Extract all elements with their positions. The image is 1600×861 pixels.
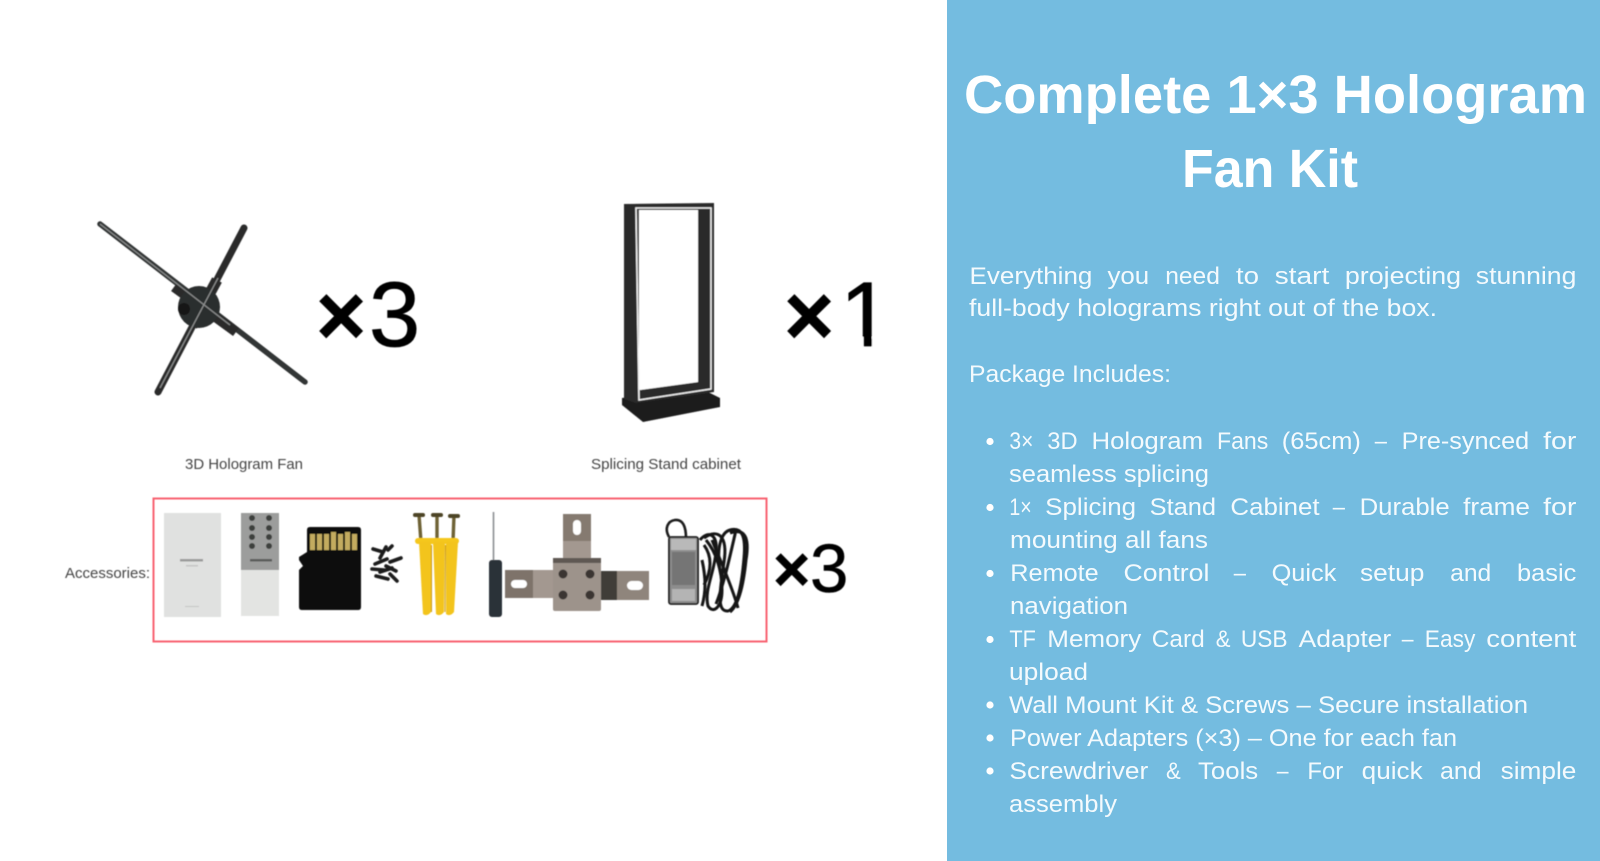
title: Complete 1×3 Hologram <box>964 65 1587 125</box>
bullet list: package contents: Cabinet <box>1230 494 1320 521</box>
icon: screwdriver <box>489 512 502 617</box>
bullet list: package contents: For <box>1307 758 1343 785</box>
quantity: accessories times three: × <box>773 533 810 605</box>
bullet list: package contents: Control <box>1124 560 1209 587</box>
panel: kit description <box>947 0 1600 861</box>
bullet list: package contents: Splicing <box>1045 494 1136 521</box>
quantity: accessories times three: 3 <box>810 530 848 607</box>
bullet list: package contents: Quick <box>1272 560 1337 587</box>
icon: splicing stand cabinet <box>622 203 720 422</box>
intro text: projecting <box>1345 263 1461 290</box>
label: 3D Hologram Fan: 3D Hologram Fan <box>185 456 303 473</box>
bullet list: package contents: quick <box>1362 758 1423 785</box>
quantity: fan times three: 3 <box>369 264 420 366</box>
bullet list: package contents: – <box>1277 758 1289 785</box>
title: Fan Kit <box>1182 139 1358 199</box>
bullet list: package contents: and <box>1440 758 1482 785</box>
bullet list: package contents <box>986 428 1577 818</box>
bullet list: package contents: assembly <box>1009 791 1118 818</box>
bullet list: package contents: 3D <box>1047 428 1078 455</box>
subheading: Package Includes: Package Includes: <box>969 361 1171 388</box>
bullet list: package contents: TF <box>1009 626 1036 653</box>
label: Accessories: Accessories: <box>65 565 150 582</box>
bullet list: package contents: basic <box>1517 560 1576 587</box>
bullet list: package contents: seamless splicing <box>1009 461 1209 488</box>
bullet list: package contents: for <box>1543 428 1576 455</box>
quantity: cabinet times one: 1 <box>840 264 891 366</box>
label: Splicing Stand cabinet: Splicing Stand cabinet <box>591 456 742 473</box>
bullet list: package contents: USB <box>1241 626 1288 653</box>
accessories box <box>154 498 766 642</box>
intro text: Everything <box>970 263 1092 290</box>
bullet list: package contents: Durable <box>1360 494 1450 521</box>
intro text: to <box>1236 263 1259 290</box>
intro text: need <box>1165 263 1220 290</box>
icon: small screws <box>372 546 401 581</box>
bullet list: package contents: – <box>1333 494 1345 521</box>
bullet list: package contents: Fans <box>1217 428 1268 455</box>
quantity: fan times three: × <box>316 268 366 364</box>
bullet list: package contents: simple <box>1501 758 1576 785</box>
intro text: start <box>1275 263 1330 290</box>
intro text: full-body holograms right out of the box. <box>969 295 1437 322</box>
bullet list: package contents: upload <box>1009 659 1088 686</box>
intro text: you <box>1108 263 1149 290</box>
bullet list: package contents: Remote <box>1010 560 1099 587</box>
quantity: cabinet times one: × <box>784 268 834 364</box>
bullet list: package contents: Hologram <box>1092 428 1203 455</box>
icon: wall mount bracket <box>505 514 649 611</box>
icon: TF memory card <box>299 527 361 610</box>
bullet list: package contents: setup <box>1360 560 1424 587</box>
bullet list: package contents: – <box>1234 560 1246 587</box>
icon: remote control <box>241 513 279 616</box>
intro text <box>969 263 1576 322</box>
bullet list: package contents: Tools <box>1198 758 1258 785</box>
quantity: fan times three <box>316 264 420 366</box>
bullet list: package contents: Easy <box>1425 626 1476 653</box>
bullet list: package contents: Pre-synced <box>1402 428 1529 455</box>
bullet list: package contents: 3× <box>1009 428 1033 455</box>
bullet list: package contents: – <box>1375 428 1387 455</box>
panel: product contents image <box>65 203 896 642</box>
bullet list: package contents: 1× <box>1009 494 1032 521</box>
quantity: cabinet times one <box>784 264 896 366</box>
bullet list: package contents: navigation <box>1010 593 1128 620</box>
bullet list: package contents: & <box>1166 758 1181 785</box>
bullet list: package contents: for <box>1543 494 1576 521</box>
bullet list: package contents: Card <box>1152 626 1205 653</box>
icon: screws and yellow wall anchors <box>413 513 460 615</box>
bullet list: package contents: – <box>1402 626 1414 653</box>
bullet list: package contents: Screwdriver <box>1009 758 1148 785</box>
bullet list: package contents: content <box>1486 626 1577 653</box>
intro text: stunning <box>1476 263 1576 290</box>
bullet list: package contents: frame <box>1463 494 1530 521</box>
quantity: accessories times three <box>773 530 848 607</box>
bullet list: package contents: Adapter <box>1299 626 1391 653</box>
bullet list: package contents: (65cm) <box>1282 428 1361 455</box>
bullet list: package contents: & <box>1216 626 1230 653</box>
bullet list: package contents: Wall Mount Kit & Screws – Secure installation <box>1009 692 1528 719</box>
icon: 3D hologram fan <box>100 224 305 392</box>
bullet list: package contents: Power Adapters (×3) – One for each fan <box>1010 725 1457 752</box>
bullet list: package contents: Memory <box>1047 626 1142 653</box>
bullet list: package contents: and <box>1450 560 1491 587</box>
bullet list: package contents: Stand <box>1150 494 1216 521</box>
icon: power adapter with cable <box>667 520 747 612</box>
icon: manual booklet <box>164 513 221 617</box>
bullet list: package contents: mounting all fans <box>1010 527 1208 554</box>
title <box>964 65 1587 199</box>
